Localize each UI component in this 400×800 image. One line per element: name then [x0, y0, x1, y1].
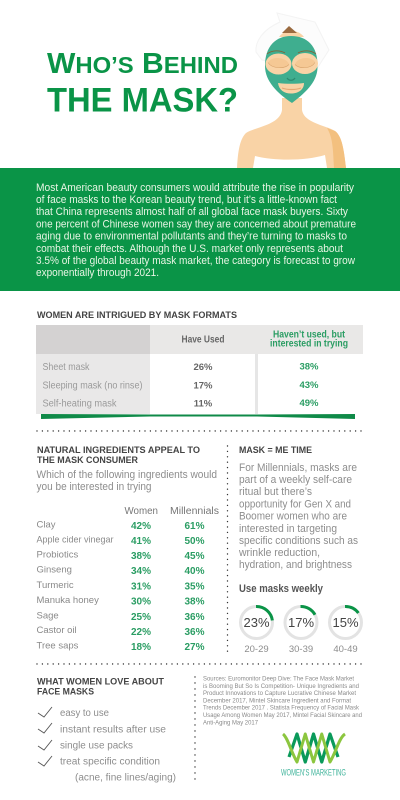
panel: natural ingredients: 40% — [184, 566, 205, 577]
panel: natural ingredients: 50% — [184, 536, 205, 547]
illustration: woman wearing green face mask — [237, 13, 346, 168]
donut chart: 30-39: 17% — [288, 615, 314, 630]
panel: natural ingredients: 61% — [184, 521, 205, 532]
donut chart: 30-39: 30-39 — [289, 644, 313, 655]
panel: natural ingredients: 41% — [131, 536, 151, 547]
panel: mask = me time: ritual but there’s — [239, 486, 312, 498]
table: mask formats: Sleeping mask (no rinse) — [42, 380, 142, 392]
donut chart: 20-29: 20-29 — [244, 644, 269, 655]
panel: natural ingredients: Sage — [36, 610, 59, 622]
panel: natural ingredients: Ginseng — [36, 564, 72, 576]
green bar under table — [41, 414, 355, 419]
panel: intro text band: 3.5% of the global beauty mask market, the category is forecast to grow — [36, 255, 355, 267]
text block: sources: Trends December 2017 . Statista Frequency of Facial Mask — [203, 704, 360, 712]
panel: natural ingredients: 38% — [131, 551, 151, 562]
panel: intro text band: aging due to environmental pollutants and they’re turning to masks to — [36, 230, 347, 242]
text block: sources: December 2017, Mintel Skincare Ingredient and Format — [203, 698, 351, 704]
text block: sources: Anti-Aging May 2017 — [203, 720, 258, 726]
panel: natural ingredients: NATURAL INGREDIENTS APPEAL TO — [37, 445, 200, 456]
panel: intro text band — [0, 168, 400, 291]
panel: mask = me time: MASK = ME TIME — [239, 445, 312, 456]
panel: mask = me time: For Millennials, masks are — [239, 462, 357, 474]
panel: natural ingredients: Turmeric — [36, 580, 74, 591]
panel: what women love: treat specific condition — [60, 756, 160, 768]
donut chart: 40-49: 40-49 — [333, 644, 358, 655]
panel: intro text band: of face masks to the Korean beauty trend, but it’s a little-known fact — [36, 194, 337, 206]
label: use masks weekly: Use masks weekly — [239, 583, 324, 595]
panel: what women love — [37, 676, 176, 784]
panel: natural ingredients: Manuka honey — [36, 595, 99, 606]
table: mask formats: Self-heating mask — [42, 398, 117, 410]
panel: what women love: FACE MASKS — [37, 686, 94, 698]
donut chart: 20-29: 23% — [243, 615, 270, 630]
heading: mask formats: WOMEN ARE INTRIGUED BY MASK FORMATS — [37, 310, 237, 321]
panel: mask = me time: part of a weekly self-care — [239, 474, 352, 486]
panel: intro text band: Most American beauty consumers would attribute the rise in popularity — [36, 182, 354, 194]
title: WHO’S BEHIND — [47, 48, 238, 80]
table: mask formats — [36, 325, 363, 419]
panel: natural ingredients: 25% — [131, 612, 151, 623]
table: mask formats: interested in trying — [270, 338, 348, 350]
panel: natural ingredients: 34% — [131, 566, 151, 577]
panel: natural ingredients: 18% — [131, 642, 151, 653]
panel: what women love: WHAT WOMEN LOVE ABOUT — [37, 676, 164, 688]
panel: mask = me time — [238, 445, 362, 655]
panel: natural ingredients: 42% — [131, 521, 151, 532]
panel: intro text band: one percent of Chinese women say they are concerned about premature — [36, 218, 356, 230]
panel: mask = me time: specific conditions such as — [239, 535, 358, 547]
text block: sources: Sources: Euromonitor Deep Dive: The Face Mask Market — [203, 676, 354, 682]
panel: natural ingredients: 36% — [184, 612, 205, 623]
panel: mask = me time: opportunity for Gen X and — [239, 498, 351, 510]
panel: natural ingredients: Clay — [36, 520, 56, 530]
text block: sources — [203, 676, 362, 726]
panel: intro text band: exponentially through 2021. — [36, 267, 159, 279]
panel: mask = me time: Boomer women who are — [239, 510, 347, 522]
panel: natural ingredients: 31% — [131, 582, 151, 592]
panel: natural ingredients: 30% — [131, 596, 151, 608]
table: mask formats: 11% — [194, 398, 213, 410]
text block: sources: Product Innovations to Capture Lucrative Chinese Market — [203, 690, 356, 697]
panel: mask = me time: interested in targeting — [239, 523, 337, 535]
logo: women's marketing — [281, 734, 346, 778]
panel: natural ingredients: Castor oil — [36, 625, 77, 636]
table: mask formats: Have Used — [182, 334, 224, 346]
panel: natural ingredients: you be interested in trying — [36, 481, 152, 493]
panel: natural ingredients: 45% — [184, 551, 205, 562]
table: mask formats: 38% — [299, 362, 319, 372]
panel: natural ingredients: Apple cider vinegar — [36, 534, 114, 546]
panel: what women love: single use packs — [60, 740, 133, 752]
panel: what women love: instant results after use — [60, 724, 166, 736]
panel: what women love: (acne, fine lines/aging) — [75, 772, 176, 784]
donut chart: 30-39 — [285, 606, 317, 655]
panel: natural ingredients: Probiotics — [36, 550, 78, 560]
table: mask formats: Haven’t used, but — [273, 330, 346, 340]
panel: natural ingredients: Tree saps — [36, 640, 79, 652]
panel: what women love: easy to use — [60, 708, 109, 719]
panel: natural ingredients: Which of the following ingredients would — [36, 469, 217, 481]
donut chart: 40-49: 15% — [332, 615, 359, 630]
text block: sources: is Booming But So Is Competition- Unique Ingredients and — [203, 683, 359, 690]
panel: natural ingredients — [36, 445, 219, 653]
table: mask formats: 49% — [299, 398, 319, 409]
panel: intro text band: that China represents almost half of all global face mask buyers. Sixty — [36, 206, 348, 218]
panel: natural ingredients: THE MASK CONSUMER — [37, 455, 138, 466]
panel: mask = me time: hydration, and brightness — [239, 559, 352, 571]
donut chart: 20-29 — [240, 606, 272, 655]
text block: sources: Usage Among Women May 2017, Mintel Facial Skincare and — [203, 712, 362, 719]
table: mask formats: 17% — [193, 380, 213, 392]
title — [47, 48, 238, 120]
title: THE MASK? — [47, 82, 238, 120]
panel: mask = me time: wrinkle reduction, — [238, 547, 320, 559]
logo: women's marketing: WOMEN’S MARKETING — [281, 768, 346, 778]
table: mask formats: 43% — [299, 380, 319, 391]
panel: natural ingredients: 27% — [184, 642, 205, 653]
icon: checkmarks — [38, 707, 52, 766]
table: mask formats: 26% — [193, 362, 213, 373]
panel: natural ingredients: 22% — [131, 627, 151, 638]
table: mask formats: Sheet mask — [42, 362, 90, 373]
panel: natural ingredients: Women — [124, 506, 158, 517]
donut chart: 40-49 — [330, 606, 362, 655]
panel: natural ingredients: Millennials — [170, 506, 219, 517]
panel: intro text band: combat their effects. Although the U.S. market only represents about — [36, 243, 343, 255]
panel: natural ingredients: 35% — [184, 582, 205, 592]
panel: natural ingredients: 38% — [184, 596, 205, 608]
panel: natural ingredients: 36% — [184, 627, 205, 638]
